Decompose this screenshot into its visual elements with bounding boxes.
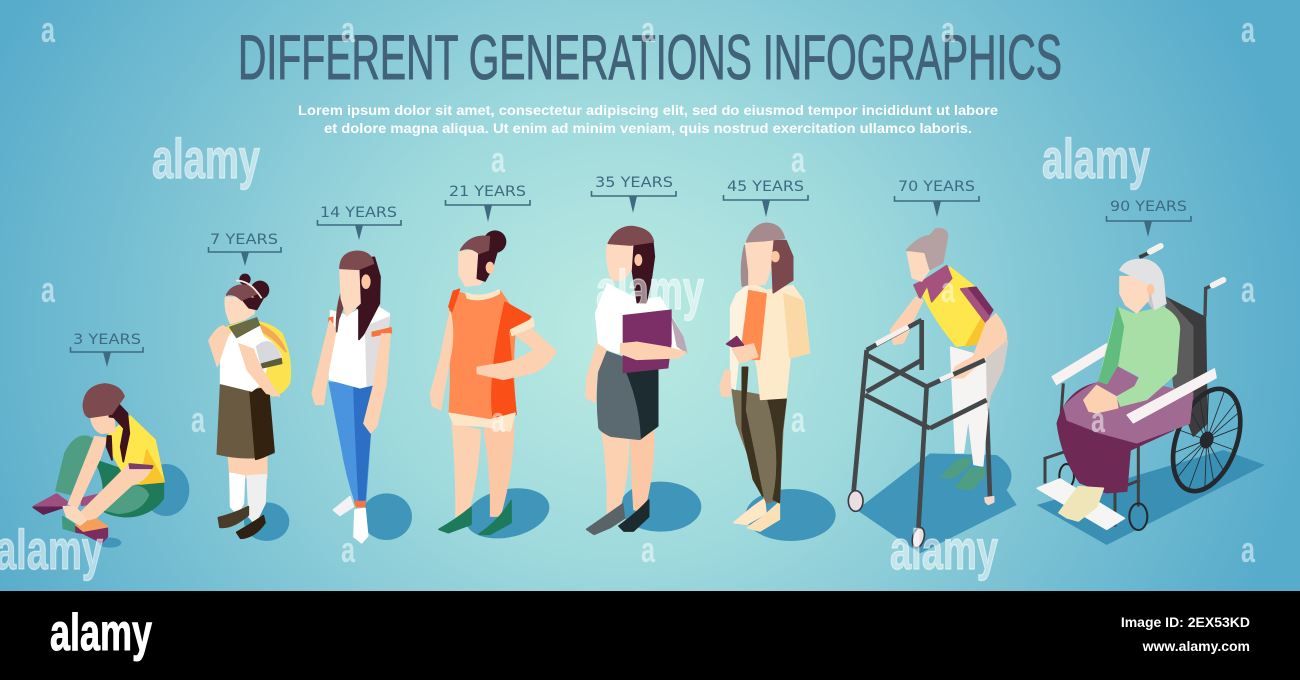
label: 7 years xyxy=(208,232,281,266)
watermarks: a xyxy=(791,139,806,180)
label: 45 years: 45 YEARS xyxy=(727,179,804,195)
label: 90 years xyxy=(1106,199,1191,237)
label: 3 years: 3 YEARS xyxy=(73,332,141,348)
wheelchair back rest xyxy=(1166,297,1207,436)
figures: 21, 35 and 45 years xyxy=(431,223,836,546)
watermarks: a xyxy=(1241,529,1256,570)
watermarks: a xyxy=(41,269,56,310)
walker back legs xyxy=(922,320,990,498)
figure: 14 year old girl in jeans xyxy=(312,251,412,543)
watermarks: a xyxy=(491,399,506,440)
figures: 70 and 90 years xyxy=(848,229,1265,553)
watermarks: a xyxy=(941,269,956,310)
label: 70 years: 70 YEARS xyxy=(898,179,975,195)
figures: 3, 7 and 14 years xyxy=(33,251,412,548)
label: 14 years xyxy=(318,205,401,240)
big wheel xyxy=(1160,380,1253,500)
watermarks: alamy xyxy=(152,127,260,190)
subtitle text xyxy=(298,102,998,136)
figure: 90 year old woman in wheelchair xyxy=(1037,246,1265,545)
watermarks: a xyxy=(341,9,356,50)
label: 45 years xyxy=(724,179,808,217)
label: 3 years xyxy=(70,332,143,367)
label: 35 years: 35 YEARS xyxy=(595,175,673,191)
watermarks: a xyxy=(941,9,956,50)
figure: 3 year old girl playing with blocks xyxy=(33,384,189,548)
watermarks: a xyxy=(191,399,206,440)
watermarks: alamy xyxy=(596,258,704,321)
figure: 21 year old woman in orange dress xyxy=(431,230,556,546)
age labels xyxy=(70,175,1191,367)
label: 35 years xyxy=(592,175,676,213)
label: 21 years xyxy=(446,184,530,222)
figure: 45 year old woman in blazer xyxy=(720,223,836,541)
footer image id: Image ID: 2EX53KD xyxy=(1121,614,1250,630)
figure: 35 year old woman with folder xyxy=(586,227,701,534)
watermarks: a xyxy=(491,139,506,180)
watermarks: a xyxy=(641,529,656,570)
watermarks: a xyxy=(341,529,356,570)
watermarks: a xyxy=(1091,399,1106,440)
watermarks: a xyxy=(641,9,656,50)
subtitle text: Lorem ipsum dolor sit amet, consectetur adipiscing elit, sed do eiusmod tempor incididunt ut labore xyxy=(298,102,998,118)
label: 14 years: 14 YEARS xyxy=(320,205,397,221)
label: 7 years: 7 YEARS xyxy=(210,232,278,248)
label: 21 years: 21 YEARS xyxy=(449,184,526,200)
subtitle text: et dolore magna aliqua. Ut enim ad minim veniam, quis nostrud exercitation ullamco laboris. xyxy=(324,120,972,136)
figure: 7 year old girl with backpack xyxy=(209,274,290,541)
walker frame xyxy=(853,320,987,530)
watermarks: a xyxy=(41,9,56,50)
watermarks: a xyxy=(1241,9,1256,50)
footer logo: alamy xyxy=(50,604,152,662)
label: 90 years: 90 YEARS xyxy=(1110,199,1187,215)
watermarks: a xyxy=(791,399,806,440)
watermarks: a xyxy=(1241,269,1256,310)
footer bar xyxy=(0,591,1300,680)
watermarks: alamy xyxy=(1042,127,1150,190)
watermarks: alamy xyxy=(890,518,998,581)
figure: 70 year old woman with walker xyxy=(848,229,1017,553)
footer url: www.alamy.com xyxy=(1142,638,1250,654)
label: 70 years xyxy=(894,179,979,217)
